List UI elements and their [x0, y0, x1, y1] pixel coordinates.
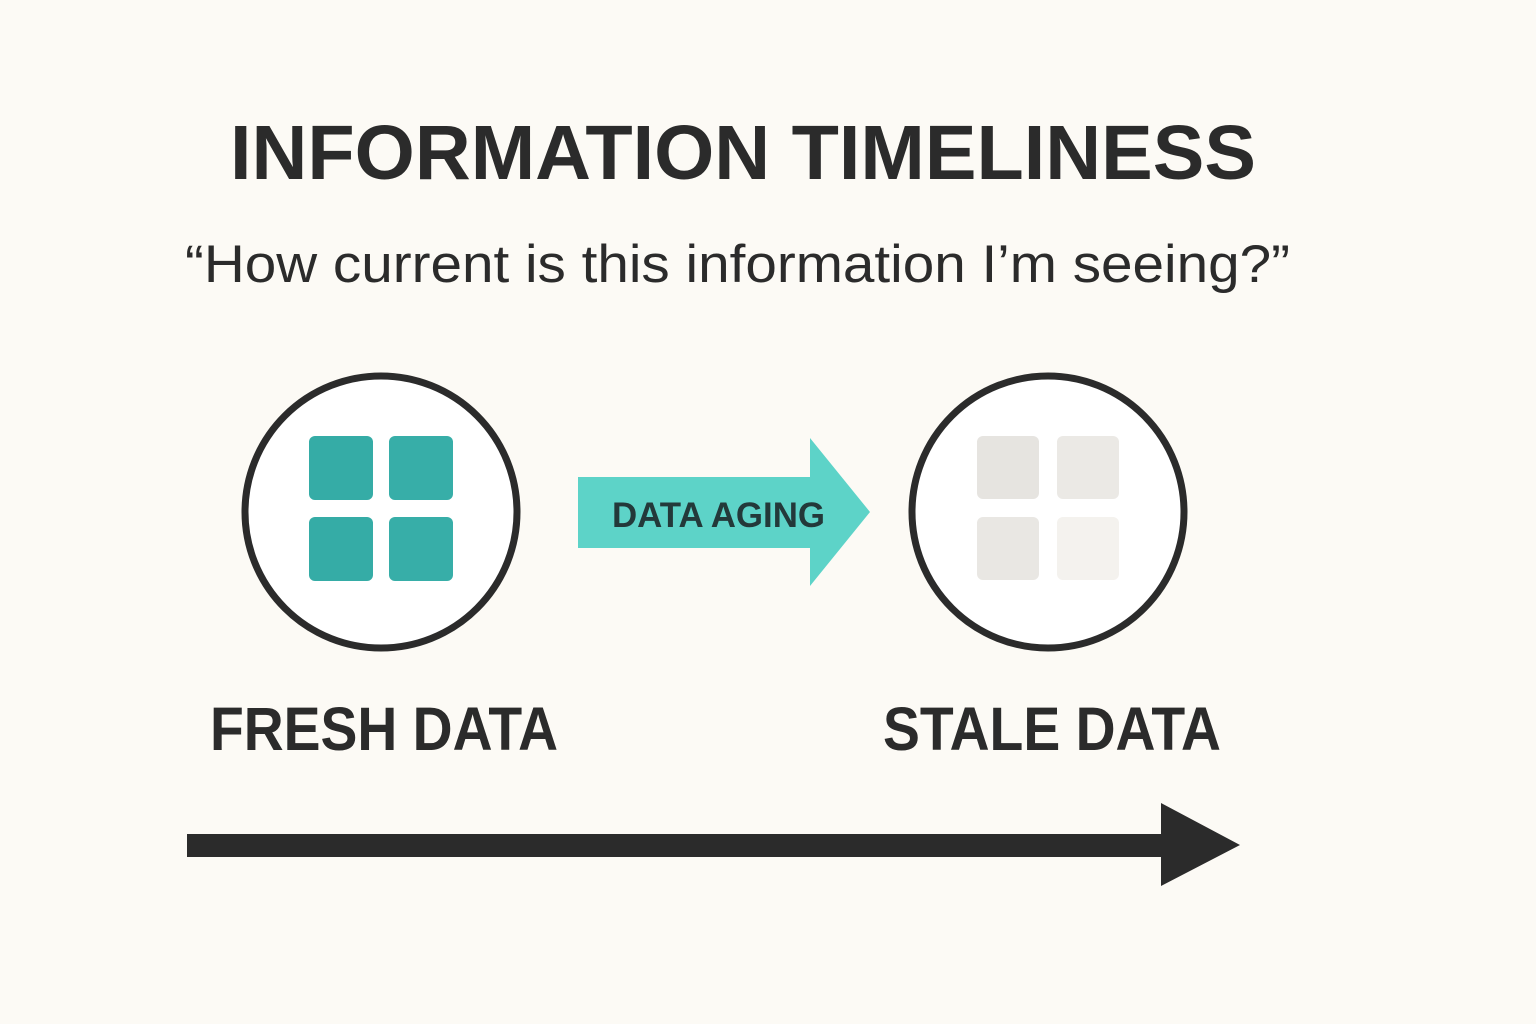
arrow: data aging: DATA AGING	[612, 496, 825, 535]
arrow: data aging	[578, 438, 870, 586]
icon: stale data circle	[912, 376, 1184, 648]
label: fresh data: FRESH DATA	[210, 695, 558, 763]
icon: fresh data circle	[245, 376, 517, 648]
arrow: time axis	[187, 803, 1240, 886]
title: INFORMATION TIMELINESS	[230, 110, 1256, 196]
subtitle question: “How current is this information I’m seeing?”	[185, 235, 1290, 294]
label: stale data: STALE DATA	[883, 695, 1221, 763]
